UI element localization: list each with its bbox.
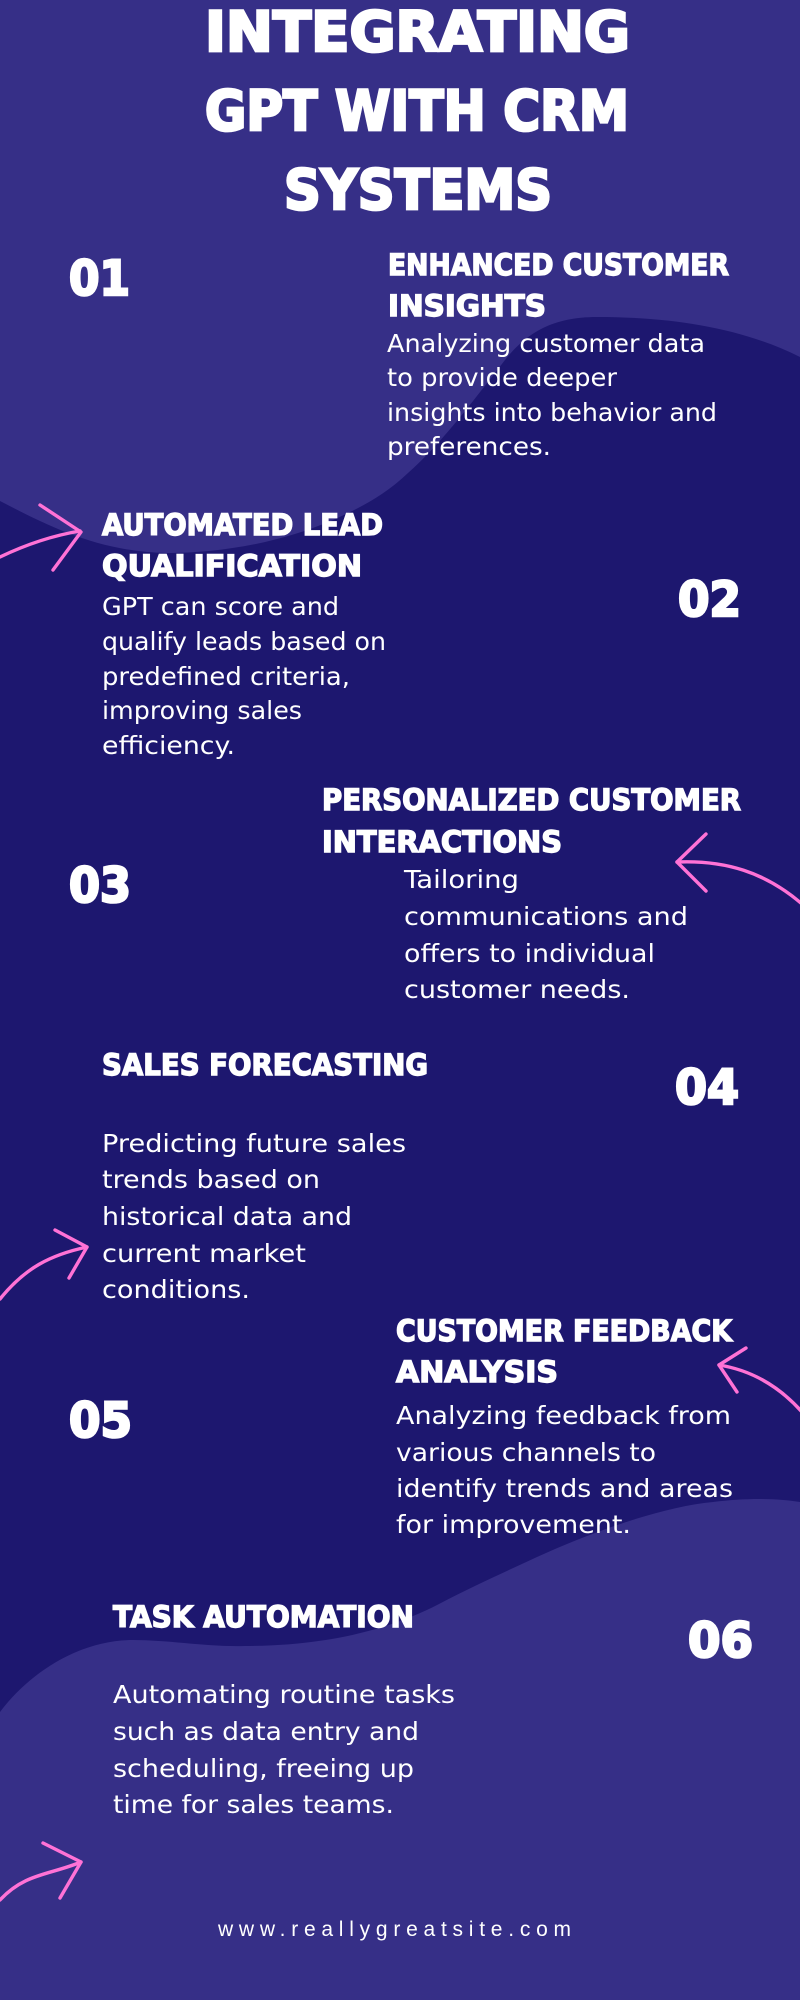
body 2: improving sales xyxy=(102,696,302,725)
background: top light wave xyxy=(0,0,800,553)
background: bottom light wave xyxy=(0,1499,800,2000)
body 4: current market xyxy=(102,1239,306,1268)
body 2: efficiency. xyxy=(102,731,235,760)
heading 2 xyxy=(102,508,383,583)
section 5: customer feedback analysis xyxy=(396,1314,733,1539)
section 3: personalized customer interactions xyxy=(322,783,741,1004)
body 2: qualify leads based on xyxy=(102,627,386,656)
heading 3 xyxy=(322,783,741,859)
body 5: various channels to xyxy=(396,1438,656,1467)
title: INTEGRATING xyxy=(205,0,630,64)
heading 3: PERSONALIZED CUSTOMER xyxy=(322,783,741,817)
heading 5: ANALYSIS xyxy=(396,1355,558,1389)
body 2 xyxy=(102,592,386,760)
number 01: 01 xyxy=(69,251,130,307)
arrow: to section 6 xyxy=(0,1843,81,1900)
section 1: enhanced customer insights xyxy=(387,248,729,461)
body 6 xyxy=(113,1680,455,1819)
body 2: GPT can score and xyxy=(102,592,339,621)
body 4: Predicting future sales xyxy=(102,1129,406,1158)
heading 1: ENHANCED CUSTOMER xyxy=(388,248,729,282)
heading 5: CUSTOMER FEEDBACK xyxy=(396,1314,733,1348)
body 1: to provide deeper xyxy=(387,363,618,392)
body 5: for improvement. xyxy=(396,1510,631,1539)
body 4: conditions. xyxy=(102,1275,250,1304)
body 5: Analyzing feedback from xyxy=(396,1401,731,1430)
body 6: time for sales teams. xyxy=(113,1790,394,1819)
heading 4: SALES FORECASTING xyxy=(102,1048,428,1082)
body 6: such as data entry and xyxy=(113,1717,419,1746)
heading 2: AUTOMATED LEAD xyxy=(102,508,383,542)
heading 6: TASK AUTOMATION xyxy=(113,1600,414,1634)
heading 1: INSIGHTS xyxy=(388,289,546,323)
body 3: customer needs. xyxy=(404,975,630,1004)
body 1: Analyzing customer data xyxy=(387,329,705,358)
body 3: offers to individual xyxy=(404,939,655,968)
body 4 xyxy=(102,1129,406,1304)
body 4: historical data and xyxy=(102,1202,352,1231)
body 2: predefined criteria, xyxy=(102,662,350,691)
section 6: task automation xyxy=(113,1600,455,1819)
section 4: sales forecasting xyxy=(102,1048,428,1304)
heading 1 xyxy=(388,248,729,323)
body 6: scheduling, freeing up xyxy=(113,1754,414,1783)
number 03: 03 xyxy=(69,858,131,914)
body 1 xyxy=(387,329,717,461)
title: GPT WITH CRM xyxy=(205,79,629,143)
arrow: to section 4 xyxy=(0,1230,87,1299)
arrow: to section 2 xyxy=(0,505,81,570)
number 05: 05 xyxy=(69,1393,132,1449)
body 1: insights into behavior and xyxy=(387,398,717,427)
arrow: to section 3 xyxy=(677,834,800,904)
body 6: Automating routine tasks xyxy=(113,1680,455,1709)
section 2: automated lead qualification xyxy=(102,508,386,760)
number 02: 02 xyxy=(678,572,741,628)
number 04: 04 xyxy=(675,1060,739,1116)
arrow: to section 5 xyxy=(719,1348,800,1412)
body 3 xyxy=(403,865,688,1004)
heading 2: QUALIFICATION xyxy=(102,549,362,583)
body 5 xyxy=(396,1401,733,1539)
heading 3: INTERACTIONS xyxy=(322,825,562,859)
body 4: trends based on xyxy=(102,1165,320,1194)
body 1: preferences. xyxy=(387,432,551,461)
body 3: Tailoring xyxy=(403,865,519,894)
number 06: 06 xyxy=(688,1613,753,1669)
footer website: www.reallygreatsite.com xyxy=(217,1918,571,1941)
heading 5 xyxy=(396,1314,733,1389)
title xyxy=(205,0,630,222)
body 5: identify trends and areas xyxy=(396,1474,733,1503)
title: SYSTEMS xyxy=(284,158,552,222)
body 3: communications and xyxy=(404,902,688,931)
